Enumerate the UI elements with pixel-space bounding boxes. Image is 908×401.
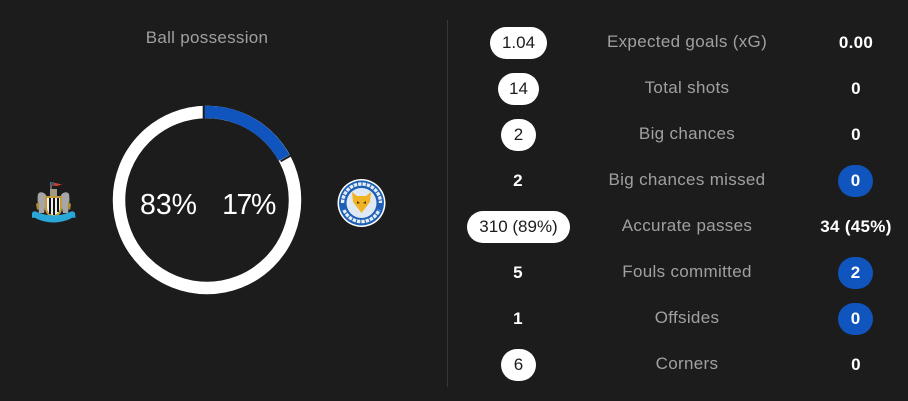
row: corners [501,349,861,381]
away value: 0.00 [839,33,873,52]
home value: 2 [513,171,523,190]
home value [467,211,570,243]
row: expected goals [490,27,873,59]
home value: 310 (89%) [479,217,558,236]
row: total shots [498,73,861,105]
stat label: Accurate passes [622,216,752,235]
away value: 2 [851,263,860,282]
stat label: Fouls committed [622,262,752,281]
stat label: Big chances [639,124,735,143]
home value: 6 [514,355,523,374]
away value: 0 [851,171,860,190]
home value [501,349,536,381]
away value [838,303,873,335]
away value: 34 (45%) [820,217,892,236]
stat label: Offsides [655,308,719,327]
home value [501,119,536,151]
home value: 2 [514,125,523,144]
row: big chances missed [513,165,873,197]
divider [447,20,448,387]
home value: 1.04 [502,33,535,52]
stat label: Big chances missed [609,170,765,189]
home value: 14 [509,79,528,98]
row: fouls committed [513,257,873,289]
row: offsides [513,303,873,335]
row: accurate passes [467,211,892,243]
stat label: Total shots [645,78,729,97]
row: big chances [501,119,861,151]
donut chart: possession [112,106,302,294]
home value: 1 [513,309,523,328]
stat label: Expected goals (xG) [607,32,767,51]
value: away possession: 17% [222,189,275,221]
away value: 0 [851,79,861,98]
stat label: Corners [656,354,718,373]
icon: Leicester City crest [338,179,386,227]
away value: 0 [851,309,860,328]
home value [498,73,539,105]
away value: 0 [851,355,861,374]
home value [490,27,547,59]
icon: Newcastle crest [32,182,76,222]
away value [838,165,873,197]
home value: 5 [513,263,523,282]
value: home possession: 83% [140,189,197,221]
heading: ball possession: Ball possession [146,28,268,47]
away value [838,257,873,289]
away value: 0 [851,125,861,144]
